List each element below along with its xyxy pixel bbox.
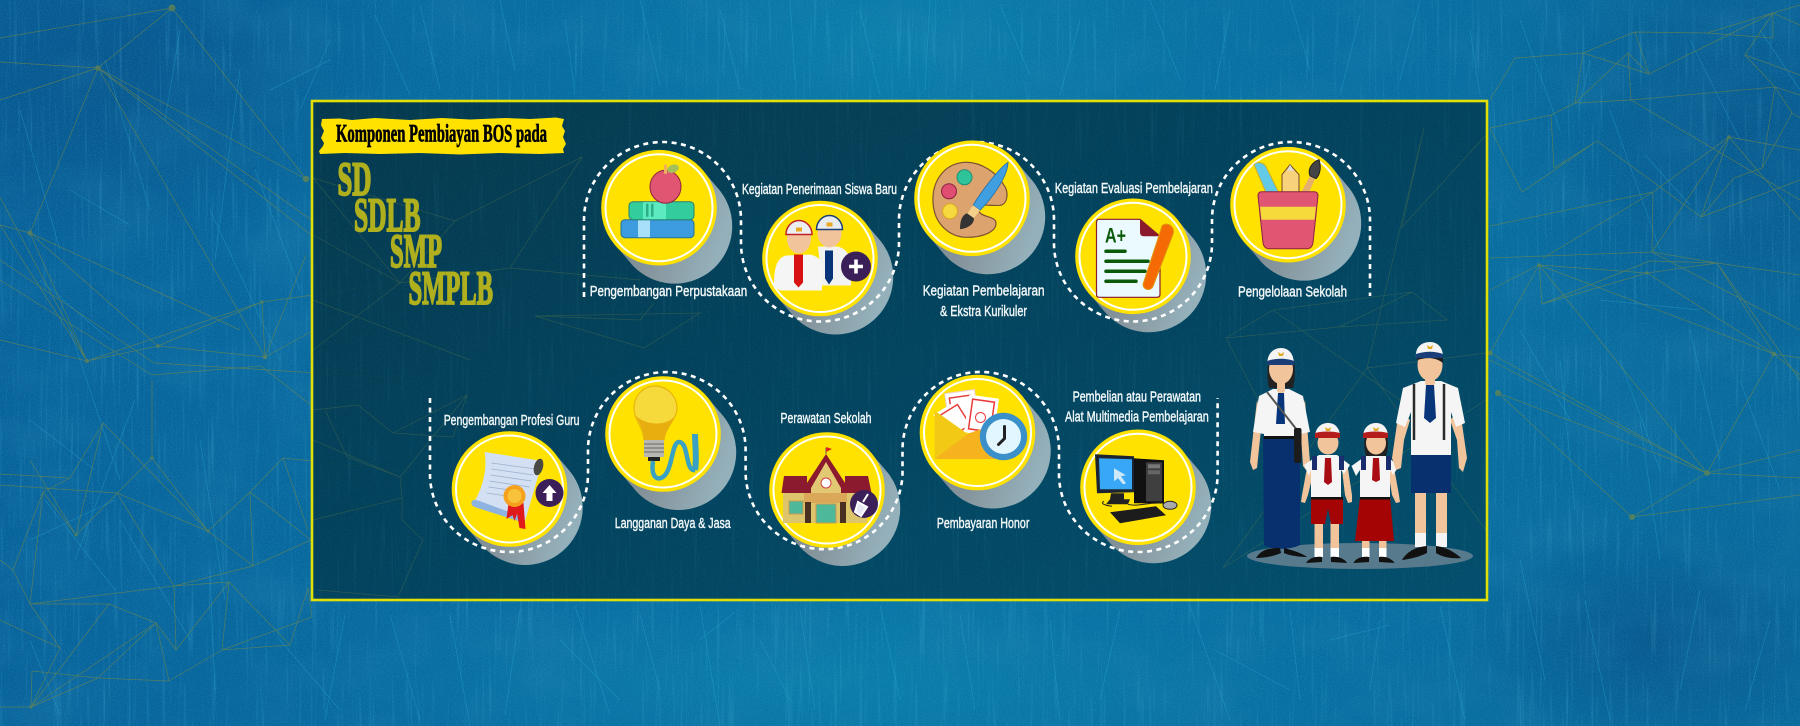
label: Pengembangan Perpustakaan: Pengembangan Perpustakaan [590,284,747,300]
school levels list [338,153,493,315]
label: Pembelian atau Perawatan Alat Multimedia Pembelajaran: Alat Multimedia Pembelajaran [1065,410,1209,426]
banner: Komponen Pembiayan BOS pada: Komponen Pembiayan BOS pada [336,120,547,148]
label: Pengelolaan Sekolah: Pengelolaan Sekolah [1238,285,1347,301]
item: Langganan Daya & Jasa [605,376,721,492]
item: Pengelolaan Sekolah [1230,147,1346,262]
item: Pengembangan Perpustakaan [601,150,717,266]
figure: older girl student [1250,348,1310,558]
icon: envelope with money and clock [933,390,1027,460]
label: Pembelian atau Perawatan Alat Multimedia Pembelajaran: Pembelian atau Perawatan [1073,390,1201,406]
dashed connector top row [584,142,1370,322]
label: Pengembangan Profesi Guru: Pengembangan Profesi Guru [444,413,580,429]
label: Pembayaran Honor: Pembayaran Honor [937,516,1030,532]
item: Kegiatan Evaluasi Pembelajaran [1075,198,1191,314]
icon: graded paper and pen: A+ [1105,224,1126,247]
item: Kegiatan Pembelajaran & Ekstra Kurikuler [914,140,1030,256]
circle drop shadows [466,161,1361,566]
icon: stationery cup [1254,160,1320,249]
icon: school building [782,447,878,523]
item: Pembelian atau Perawatan Alat Multimedia [1080,430,1196,545]
label: Perawatan Sekolah: Perawatan Sekolah [780,411,872,427]
figure: older boy student [1392,342,1467,560]
label: Kegiatan Penerimaan Siswa Baru: Kegiatan Penerimaan Siswa Baru [742,182,897,198]
label: Kegiatan Pembelajaran & Ekstra Kurikuler: & Ekstra Kurikuler [940,304,1027,320]
figure: small boy student [1301,423,1352,563]
label: Pembelian atau Perawatan Alat Multimedia Pembelajaran [1065,390,1209,426]
icon: paint palette and brush [933,162,1008,237]
icon: light bulb [634,386,696,478]
banner: Komponen Pembiayan BOS pada [319,118,566,154]
item: Kegiatan Penerimaan Siswa Baru [762,201,878,316]
icon: books and apple [621,163,694,238]
label: Kegiatan Pembelajaran & Ekstra Kurikuler [923,284,1044,320]
icon: students with plus badge [774,216,871,290]
item: Pembayaran Honor [920,375,1035,490]
ground ellipse [1247,543,1473,569]
school levels list: SDLB [354,189,420,242]
school levels list: SMPLB [408,262,493,315]
main panel [312,101,1487,600]
dashed connector bottom row [430,372,1218,552]
label: Langganan Daya & Jasa: Langganan Daya & Jasa [615,516,731,532]
icon: certificate scroll [471,452,564,529]
figure: small girl student [1352,423,1400,563]
school levels list: SMP [390,225,442,278]
item: Perawatan Sekolah [769,432,885,548]
icon: desktop computer [1095,454,1177,523]
illustration: four students [1247,342,1473,569]
item: Pengembangan Profesi Guru [452,431,567,547]
label: Kegiatan Evaluasi Pembelajaran: Kegiatan Evaluasi Pembelajaran [1055,181,1213,197]
label: Kegiatan Pembelajaran & Ekstra Kurikuler: Kegiatan Pembelajaran [923,284,1044,300]
school levels list: SD [338,153,372,206]
